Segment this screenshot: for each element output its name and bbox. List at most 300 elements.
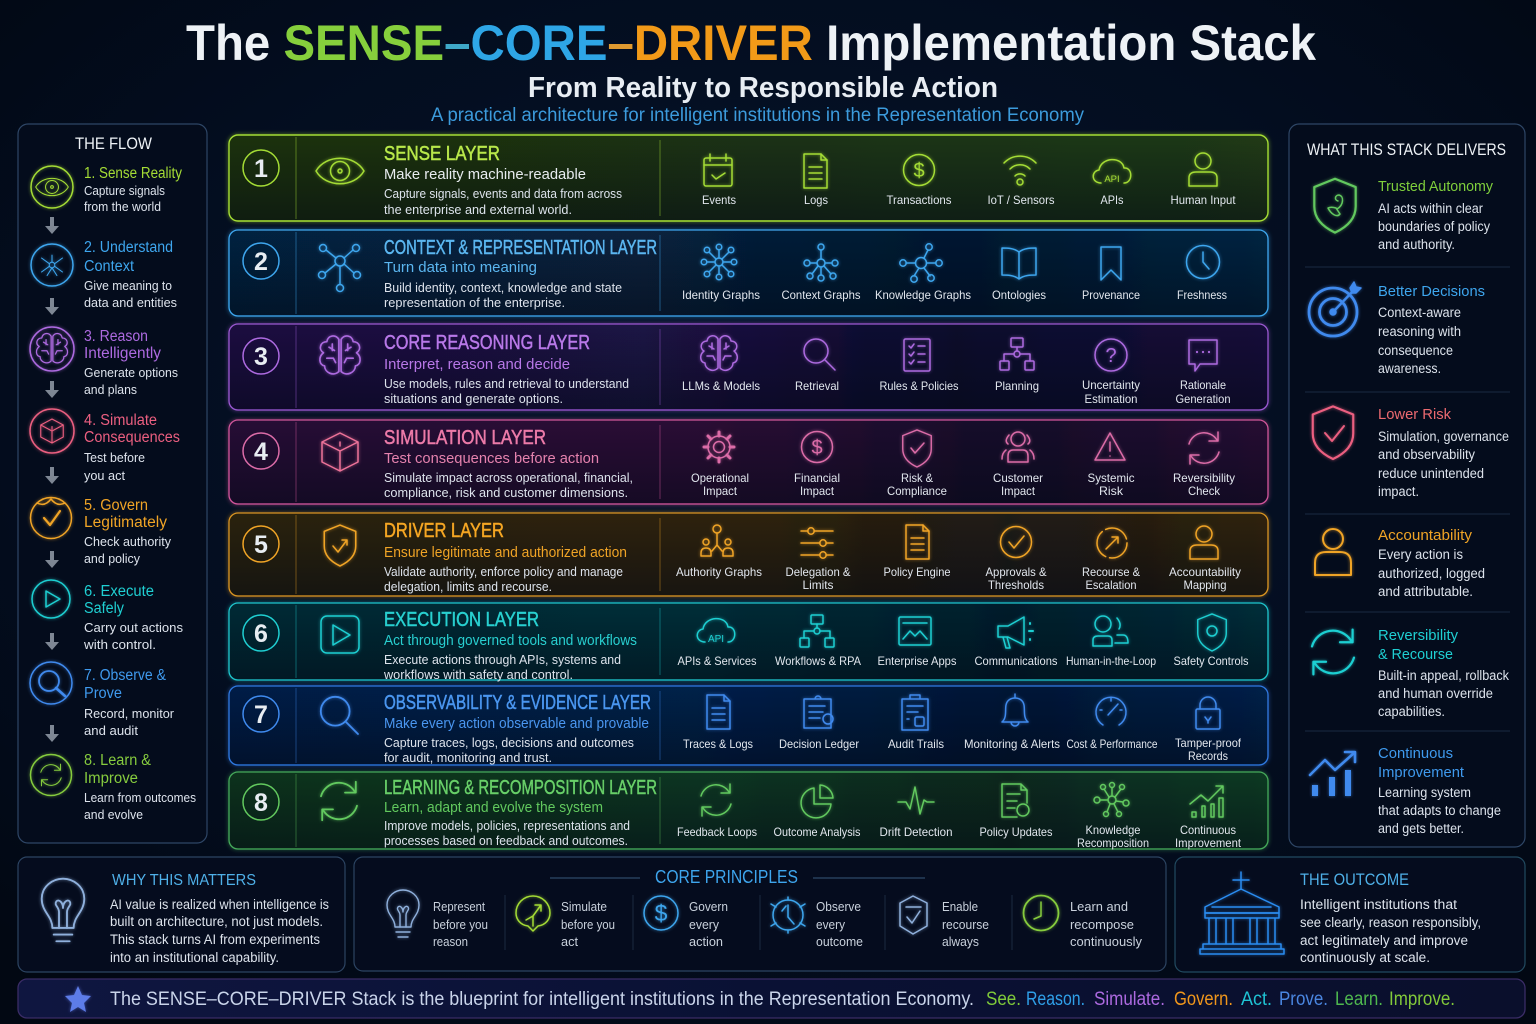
benefit: trusted autonomy: Trusted Autonomy [1378, 178, 1493, 195]
benefit: trusted autonomy: and authority. [1378, 237, 1455, 252]
item: uncertainty estimation: Uncertainty [1082, 378, 1140, 392]
layer text [384, 520, 627, 594]
flow step 8: learn and improve: 8. Learn & [84, 752, 152, 769]
outcome body: continuously at scale. [1300, 950, 1430, 965]
layer text: for audit, monitoring and trust. [384, 751, 552, 765]
item: logs: Logs [804, 193, 828, 207]
number badge 8 [243, 784, 279, 820]
flow step 8: learn and improve: Improve [84, 770, 138, 787]
panel: simulation layer [229, 420, 1268, 504]
item: transactions: $ [913, 160, 925, 182]
panel: observability and evidence layer [229, 686, 1268, 765]
item: systemic risk: Systemic [1088, 471, 1134, 485]
panel: sense layer [229, 135, 1268, 221]
principle: observe: every [816, 917, 845, 932]
item: apis and services: API [708, 634, 724, 645]
item: outcome analysis [774, 785, 860, 839]
item: authority graphs: Authority Graphs [676, 565, 762, 579]
number badge 4 [243, 433, 279, 469]
item: audit trails: Audit Trails [888, 737, 944, 751]
why body [110, 897, 329, 965]
layer text: situations and generate options. [384, 392, 563, 406]
benefit: accountability: Accountability [1378, 527, 1472, 544]
number badge 6 [243, 615, 279, 651]
item: uncertainty estimation: Estimation [1084, 392, 1138, 406]
item: approvals and thresholds: Thresholds [988, 578, 1044, 592]
layer text: LEARNING & RECOMPOSITION LAYER [384, 777, 657, 799]
benefit: lower risk: reduce unintended [1378, 466, 1484, 481]
footer keywords: Prove. [1279, 989, 1328, 1010]
panel: core principles [354, 857, 1166, 971]
layer text: Turn data into meaning [384, 259, 537, 276]
panel: what this stack delivers [1289, 124, 1525, 847]
why body: This stack turns AI from experiments [110, 932, 320, 947]
layer text: Capture traces, logs, decisions and outcomes [384, 736, 634, 750]
item: human input [1170, 153, 1236, 207]
principle: govern: Govern [689, 899, 728, 914]
benefit: better decisions: Better Decisions [1378, 283, 1485, 300]
layer text: compliance, risk and customer dimensions. [384, 486, 628, 500]
why body: AI value is realized when intelligence is [110, 897, 329, 912]
arrow [45, 217, 59, 234]
layer text: Learn, adapt and evolve the system [384, 799, 603, 816]
item: customer impact [993, 432, 1043, 498]
item: planning [995, 338, 1039, 393]
item: policy engine [884, 525, 951, 579]
number badge 6: 6 [254, 620, 268, 648]
principle: observe: outcome [816, 934, 863, 949]
item: accountability mapping: Mapping [1184, 578, 1226, 592]
icon: shield [324, 525, 356, 566]
panel: driver layer [229, 513, 1268, 596]
arrow [45, 298, 59, 315]
item: events: Events [702, 193, 736, 207]
item: knowledge recomposition [1077, 782, 1149, 850]
flow step 5: govern legitimately: 5. Govern [84, 497, 148, 514]
item: tamper-proof records [1175, 697, 1242, 763]
panel: context and representation layer [229, 230, 1268, 316]
item: risk and compliance: Risk & [901, 471, 933, 485]
layer text: Validate authority, enforce policy and manage [384, 565, 623, 579]
why body: into an institutional capability. [110, 950, 279, 965]
item: risk and compliance: Compliance [887, 484, 947, 498]
item: apis: APIs [1100, 193, 1124, 207]
layer text: Capture signals, events and data from across [384, 187, 622, 201]
item: tamper-proof records: Tamper-proof [1175, 736, 1242, 750]
benefit: lower risk: impact. [1378, 484, 1419, 499]
item: policy updates [980, 784, 1052, 839]
footer banner [18, 979, 1525, 1018]
benefit: reversibility and recourse: & Recourse [1378, 646, 1453, 663]
benefit: accountability: Every action is [1378, 547, 1463, 562]
item: communications [974, 617, 1058, 668]
subtitle: From Reality to Responsible Action [528, 72, 998, 104]
item: rules and policies: Rules & Policies [880, 379, 958, 393]
footer keywords: Act. [1241, 989, 1272, 1010]
item: rules and policies [880, 339, 958, 393]
principle: observe [771, 897, 863, 949]
flow step 5: govern legitimately: Legitimately [84, 514, 167, 531]
flow step 4: simulate consequences [30, 409, 180, 483]
layer text: SIMULATION LAYER [384, 427, 546, 449]
panel: why this matters [18, 857, 345, 972]
principle: enable recourse: recourse [942, 917, 989, 932]
item: operational impact: Impact [703, 484, 738, 498]
icon: cube [322, 433, 358, 471]
why heading: WHY THIS MATTERS [112, 872, 256, 889]
item: context graphs [782, 244, 860, 302]
item: uncertainty estimation: ? [1105, 345, 1117, 367]
layer text: Execute actions through APIs, systems and [384, 653, 621, 667]
item: customer impact: Customer [993, 471, 1043, 485]
outcome body [1300, 897, 1481, 965]
benefit: better decisions [1309, 282, 1485, 376]
flow step 3: reason intelligently: Generate options [84, 366, 178, 380]
number badge 8: 8 [254, 789, 268, 817]
item: recourse and escalation [1082, 528, 1140, 592]
layer text [384, 777, 657, 848]
item: ontologies: Ontologies [992, 288, 1046, 302]
flow step 3: reason intelligently: 3. Reason [84, 328, 148, 345]
benefit: accountability [1315, 527, 1485, 599]
panel: the flow [18, 124, 207, 843]
principle: simulate: Simulate [561, 899, 607, 914]
layer text [384, 692, 651, 765]
item: decision ledger [779, 696, 859, 751]
item: audit trails [888, 695, 944, 751]
title: The SENSE–CORE–DRIVER Implementation Stack [186, 15, 1316, 71]
item: llms and models: LLMs & Models [682, 379, 760, 393]
item: enterprise apps: Enterprise Apps [878, 654, 956, 668]
number badge 3 [243, 338, 279, 374]
layer text: Interpret, reason and decide [384, 356, 570, 373]
item: planning: Planning [995, 379, 1039, 393]
item: retrieval: Retrieval [795, 379, 839, 393]
item: logs [804, 154, 828, 207]
item: policy updates: Policy Updates [980, 825, 1052, 839]
benefit: better decisions: reasoning with [1378, 324, 1461, 339]
principle: govern [644, 896, 728, 949]
flow step 5: govern legitimately: and policy [84, 552, 141, 566]
flow step 2: understand context: 2. Understand [84, 239, 173, 256]
item: systemic risk [1088, 433, 1134, 498]
flow step 8: learn and improve: Learn from outcomes [84, 791, 196, 805]
layer text: Make every action observable and provable [384, 715, 649, 732]
outcome heading: THE OUTCOME [1300, 871, 1409, 889]
item: freshness: Freshness [1177, 288, 1227, 302]
item: operational impact: Operational [691, 471, 749, 485]
benefit: accountability: and attributable. [1378, 584, 1473, 599]
item: risk and compliance [887, 430, 947, 498]
item: cost and performance: Cost & Performance [1066, 737, 1158, 751]
flow step 8: learn and improve [30, 752, 196, 822]
layer text [384, 143, 622, 217]
footer keywords: Learn. [1335, 989, 1383, 1010]
item: reversibility check: Check [1188, 484, 1221, 498]
item: knowledge recomposition: Knowledge [1086, 823, 1141, 837]
layer text: CORE REASONING LAYER [384, 332, 590, 354]
layer text [384, 237, 657, 310]
layer text: processes based on feedback and outcomes. [384, 834, 628, 848]
item: context graphs: Context Graphs [782, 288, 860, 302]
item: policy engine: Policy Engine [884, 565, 951, 579]
item: human in the loop [1066, 616, 1156, 668]
item: transactions [886, 154, 952, 207]
item: human input: Human Input [1170, 193, 1236, 207]
principle: govern: every [689, 917, 719, 932]
flow heading: THE FLOW [75, 135, 152, 153]
layer text: Act through governed tools and workflows [384, 632, 637, 649]
item: monitoring and alerts [964, 694, 1060, 751]
flow step 3: reason intelligently [30, 327, 178, 397]
principle: simulate: before you [561, 917, 615, 932]
principle: observe: Observe [816, 899, 861, 914]
footer keywords: Improve. [1389, 989, 1455, 1010]
flow step 1: sense reality: from the world [84, 200, 161, 214]
item: iot sensors [988, 156, 1054, 207]
icon: light bulb [42, 879, 84, 941]
benefit: reversibility and recourse: capabilities. [1378, 704, 1445, 719]
panel: learning and recomposition layer [229, 772, 1268, 850]
number badge 1: 1 [254, 155, 268, 183]
item: traces and logs: Traces & Logs [683, 737, 753, 751]
footer keywords [986, 989, 1455, 1010]
benefit: reversibility and recourse: Reversibility [1378, 627, 1458, 644]
item: drift detection: Drift Detection [880, 825, 952, 839]
flow step 7: observe and prove [30, 662, 174, 738]
outcome body: act legitimately and improve [1300, 933, 1468, 948]
number badge 3: 3 [254, 343, 268, 371]
item: delegation and limits: Delegation & [786, 565, 850, 579]
item: customer impact: Impact [1001, 484, 1036, 498]
benefit: lower risk: Simulation, governance [1378, 429, 1509, 444]
benefit: continuous improvement: and gets better. [1378, 821, 1464, 836]
layer text: the enterprise and external world. [384, 203, 572, 217]
item: ontologies [992, 248, 1046, 302]
flow step 6: execute safely: Safely [84, 600, 124, 617]
arrow [45, 633, 59, 650]
benefit: reversibility and recourse: and human override [1378, 686, 1493, 701]
layer text: DRIVER LAYER [384, 520, 504, 542]
arrow [45, 381, 59, 398]
icon: brain [320, 336, 360, 374]
icon: magnifier [321, 697, 358, 734]
layer text: Build identity, context, knowledge and state [384, 281, 622, 295]
flow step 2: understand context [31, 239, 177, 310]
principle: learn and recompose: recompose [1070, 917, 1134, 932]
principle: simulate [516, 896, 615, 949]
item: apis and services: APIs & Services [678, 654, 756, 668]
item: delegation and limits: Limits [802, 578, 834, 592]
benefit: better decisions: consequence [1378, 343, 1453, 358]
item: drift detection [880, 787, 952, 839]
benefit: trusted autonomy [1314, 178, 1493, 252]
principles heading: CORE PRINCIPLES [655, 867, 798, 887]
benefit: lower risk: and observability [1378, 447, 1475, 462]
principle: learn and recompose: Learn and [1070, 899, 1128, 914]
layer text: SENSE LAYER [384, 143, 500, 165]
principle: represent [387, 890, 488, 949]
icon: star [65, 986, 91, 1012]
flow step 8: learn and improve: and evolve [84, 808, 143, 822]
benefit: continuous improvement: Continuous [1378, 745, 1453, 762]
flow step 2: understand context: Give meaning to [84, 279, 172, 293]
benefit: lower risk [1313, 406, 1509, 499]
item: monitoring and alerts: Monitoring & Alerts [964, 737, 1060, 751]
item: provenance [1082, 247, 1140, 302]
number badge 2 [243, 243, 279, 279]
icon: learning cycle [321, 782, 357, 820]
flow step 7: observe and prove: Record, monitor [84, 707, 174, 721]
item: events [702, 154, 736, 207]
item: rationale generation [1176, 340, 1230, 406]
layer text: representation of the enterprise. [384, 296, 565, 310]
item: continuous improvement [1175, 786, 1242, 850]
number badge 4: 4 [254, 438, 268, 466]
principle: govern: action [689, 934, 723, 949]
item: accountability mapping [1169, 526, 1241, 592]
item: recourse and escalation: Recourse & [1082, 565, 1140, 579]
outcome body: Intelligent institutions that [1300, 897, 1457, 912]
panel: execution layer [229, 603, 1268, 682]
item: safety controls [1174, 614, 1248, 668]
number badge 7: 7 [254, 701, 268, 729]
principle: enable recourse [900, 896, 989, 949]
flow step 5: govern legitimately [30, 497, 172, 566]
item: financial impact: Financial [794, 471, 840, 485]
benefit: continuous improvement: Improvement [1378, 764, 1465, 781]
item: continuous improvement: Continuous [1180, 823, 1236, 837]
icon: play [321, 616, 359, 653]
item: accountability mapping: Accountability [1169, 565, 1241, 579]
benefit: reversibility and recourse: Built-in appeal, rollback [1378, 668, 1509, 683]
layer text [384, 427, 633, 500]
footer keywords: Govern. [1174, 989, 1233, 1010]
item: safety controls: Safety Controls [1174, 654, 1248, 668]
item: knowledge recomposition: Recomposition [1077, 836, 1149, 850]
layer text: Use models, rules and retrieval to understand [384, 377, 629, 391]
item: tamper-proof records: Records [1188, 749, 1228, 763]
item: rationale generation: Generation [1176, 392, 1230, 406]
item: knowledge graphs [875, 244, 971, 302]
layer text: Ensure legitimate and authorized action [384, 544, 627, 561]
icon: institution building [1200, 872, 1284, 954]
flow step 2: understand context: data and entities [84, 296, 177, 310]
item: financial impact [794, 432, 840, 498]
item: continuous improvement: Improvement [1175, 836, 1242, 850]
item: delegation and limits [786, 528, 850, 592]
item: approvals and thresholds [986, 526, 1046, 592]
footer keywords: Reason. [1026, 989, 1085, 1010]
layer text: Test consequences before action [384, 450, 599, 467]
item: knowledge graphs: Knowledge Graphs [875, 288, 971, 302]
item: freshness [1177, 246, 1227, 302]
item: llms and models [682, 336, 760, 393]
item: operational impact [691, 432, 749, 498]
item: financial impact: $ [811, 437, 823, 459]
item: apis: API [1104, 174, 1120, 185]
panel: core reasoning layer [229, 324, 1268, 410]
flow step 4: simulate consequences: 4. Simulate [84, 412, 157, 429]
layer text: EXECUTION LAYER [384, 609, 539, 631]
arrow [45, 467, 59, 484]
flow step 7: observe and prove: and audit [84, 724, 139, 738]
item: identity graphs [682, 244, 760, 302]
flow step 7: observe and prove: Prove [84, 685, 122, 702]
flow step 3: reason intelligently: and plans [84, 383, 137, 397]
benefit: accountability: authorized, logged [1378, 566, 1485, 581]
layer text: Make reality machine-readable [384, 166, 586, 183]
layer text: OBSERVABILITY & EVIDENCE LAYER [384, 692, 651, 714]
principle: represent: Represent [433, 899, 485, 914]
item: feedback loops [677, 784, 757, 839]
number badge 5: 5 [254, 531, 268, 559]
benefit: lower risk: Lower Risk [1378, 406, 1451, 423]
item: workflows and rpa [775, 615, 861, 668]
benefit: reversibility and recourse [1312, 627, 1509, 719]
footer statement: The SENSE–CORE–DRIVER Stack is the blueprint for intelligent institutions in the Representation Economy. [110, 989, 974, 1010]
footer keywords: See. [986, 989, 1021, 1010]
item: human in the loop: Human-in-the-Loop [1066, 654, 1156, 668]
benefit: continuous improvement [1310, 745, 1501, 836]
item: feedback loops: Feedback Loops [677, 825, 757, 839]
principle: learn and recompose: continuously [1070, 934, 1142, 949]
panel heading: WHAT THIS STACK DELIVERS [1307, 141, 1506, 159]
item: retrieval [795, 339, 839, 393]
item: systemic risk: Risk [1099, 484, 1124, 498]
item: identity graphs: Identity Graphs [682, 288, 760, 302]
flow step 5: govern legitimately: Check authority [84, 535, 172, 549]
flow step 1: sense reality [31, 165, 182, 214]
item: transactions: Transactions [886, 193, 952, 207]
principle: simulate: act [561, 934, 578, 949]
panel: the outcome [1175, 857, 1525, 972]
item: reversibility check: Reversibility [1173, 471, 1235, 485]
benefit: trusted autonomy: boundaries of policy [1378, 219, 1490, 234]
item: recourse and escalation: Escalation [1086, 578, 1136, 592]
layer text: CONTEXT & REPRESENTATION LAYER [384, 237, 657, 259]
flow step 4: simulate consequences: Test before [84, 451, 145, 465]
flow step 6: execute safely: Carry out actions [84, 621, 183, 635]
item: authority graphs [676, 525, 762, 579]
item: reversibility check [1173, 432, 1235, 498]
flow step 1: sense reality: 1. Sense Reality [84, 165, 182, 182]
layer text: Improve models, policies, representations and [384, 819, 630, 833]
item: financial impact: Impact [800, 484, 835, 498]
principle: enable recourse: Enable [942, 899, 978, 914]
why body: built on architecture, not just models. [110, 914, 323, 929]
benefit: continuous improvement: Learning system [1378, 785, 1471, 800]
number badge 2: 2 [254, 248, 268, 276]
layer text [383, 609, 637, 682]
item: apis and services [678, 619, 756, 668]
item: provenance: Provenance [1082, 288, 1140, 302]
flow step 6: execute safely: 6. Execute [84, 583, 154, 600]
icon: network hub [318, 244, 360, 292]
item: traces and logs [683, 695, 753, 751]
number badge 5 [243, 526, 279, 562]
layer text: Simulate impact across operational, financial, [384, 471, 633, 485]
arrow [45, 725, 59, 742]
benefit: trusted autonomy: AI acts within clear [1378, 201, 1483, 216]
principle: enable recourse: always [942, 934, 979, 949]
layer text: delegation, limits and recourse. [384, 580, 552, 594]
benefit: continuous improvement: that adapts to change [1378, 803, 1501, 818]
layer text: workflows with safety and control. [383, 668, 573, 682]
layer text [384, 332, 629, 406]
footer keywords: Simulate. [1094, 989, 1165, 1010]
tagline: A practical architecture for intelligent institutions in the Representation Economy [431, 105, 1084, 126]
